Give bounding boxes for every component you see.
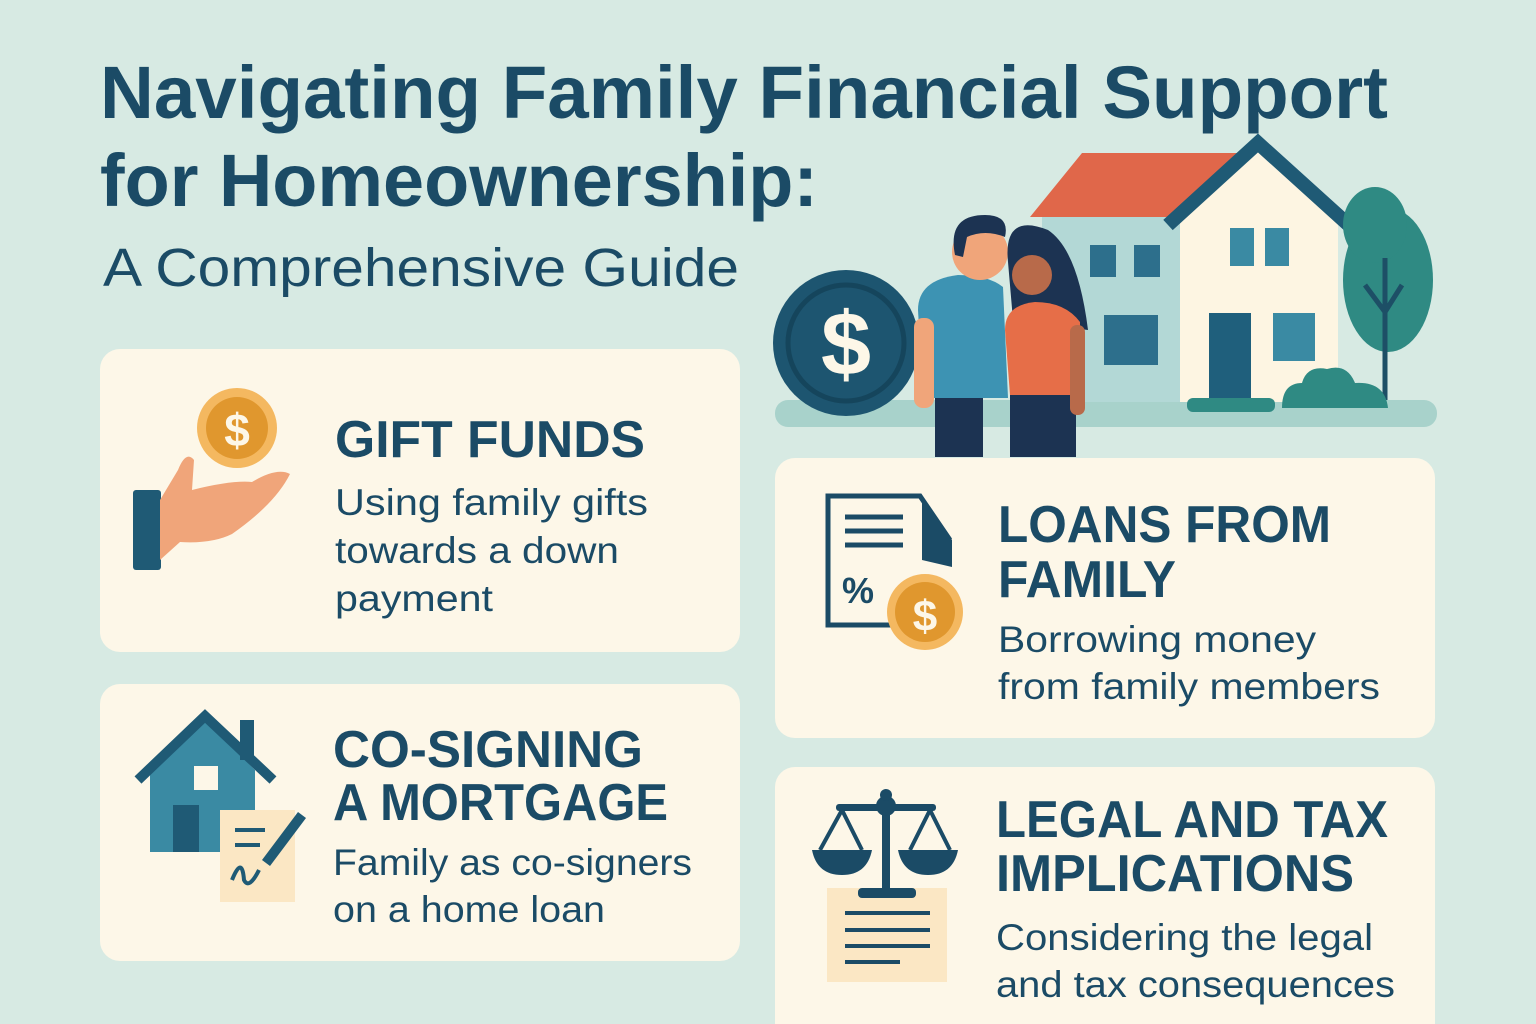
title: Navigating Family Financial Support — [100, 51, 1388, 134]
panel: legal and tax: IMPLICATIONS — [996, 845, 1354, 903]
panel: loans from family: from family members — [998, 666, 1380, 707]
hero illustration: couple, coin and house — [773, 143, 1437, 457]
icon: scales and document — [812, 789, 958, 982]
house — [1030, 143, 1352, 412]
icon: loan document with coin: % — [842, 570, 874, 611]
panel: co-signing: CO-SIGNING — [333, 721, 643, 779]
panel: legal and tax: and tax consequences — [996, 964, 1395, 1005]
panel: gift funds: Using family gifts — [335, 482, 648, 523]
panel: loans from family: FAMILY — [998, 551, 1176, 609]
panel: co-signing: Family as co-signers — [333, 842, 692, 883]
icon: hand with coin — [133, 388, 290, 570]
icon: loan document with coin — [828, 496, 963, 650]
title — [100, 51, 1388, 222]
title: for Homeownership: — [100, 139, 818, 222]
panel: co-signing: on a home loan — [333, 889, 605, 930]
icon: loan document with coin: $ — [913, 592, 937, 641]
icon: dollar coin — [773, 270, 919, 416]
panel: co-signing — [100, 684, 740, 961]
panel: loans from family — [775, 458, 1435, 738]
panel: gift funds: payment — [335, 578, 494, 619]
icon: hand with coin: $ — [224, 404, 250, 456]
panel: gift funds — [100, 349, 740, 652]
panel: legal and tax: Considering the legal — [996, 917, 1373, 958]
couple — [914, 215, 1088, 457]
panel: gift funds: GIFT FUNDS — [335, 411, 645, 469]
icon: house with pen — [138, 716, 306, 902]
panel: co-signing: A MORTGAGE — [333, 774, 668, 832]
panel: loans from family: Borrowing money — [998, 619, 1317, 660]
panel: legal and tax: LEGAL AND TAX — [996, 791, 1388, 849]
panel: legal and tax — [775, 767, 1435, 1024]
panel: gift funds: towards a down — [335, 530, 619, 571]
icon: dollar coin: $ — [821, 295, 871, 395]
subtitle: A Comprehensive Guide — [103, 238, 739, 298]
panel: loans from family: LOANS FROM — [998, 496, 1331, 554]
tree — [1282, 187, 1433, 408]
